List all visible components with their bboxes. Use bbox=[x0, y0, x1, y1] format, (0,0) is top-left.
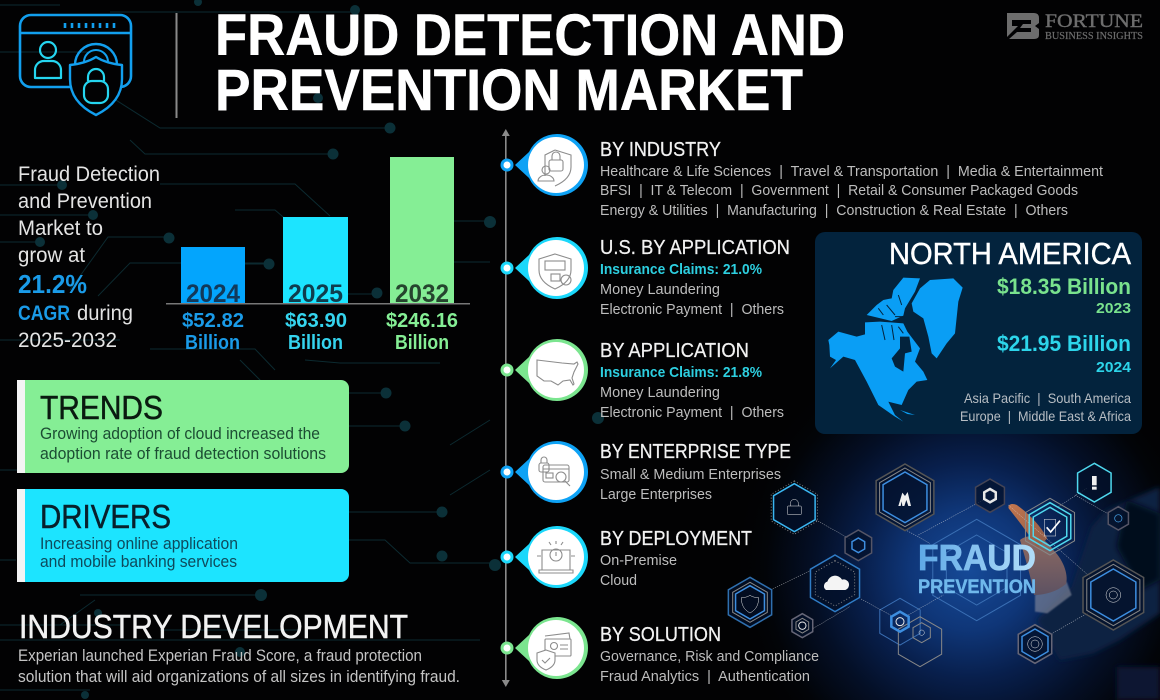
logo: Fortune Business Insights: BUSINESS INSIGHTS bbox=[1045, 31, 1143, 42]
icon: U.S. map outline bbox=[537, 360, 578, 385]
bar chart: market size bbox=[166, 157, 470, 354]
text: market growth statement: 2025-2032 bbox=[18, 329, 117, 352]
panel: North America bbox=[815, 232, 1142, 434]
panel: North America: Asia Pacific | South America bbox=[964, 390, 1131, 406]
divider bbox=[176, 13, 178, 118]
text: U.S. by application: U.S. BY APPLICATION bbox=[600, 237, 790, 259]
text: by deployment: BY DEPLOYMENT bbox=[600, 528, 752, 550]
text: by application: Money Laundering bbox=[600, 384, 720, 401]
text: market growth statement: during bbox=[77, 302, 133, 325]
text: market growth statement: Market to bbox=[18, 217, 103, 240]
hand and suit bbox=[1008, 487, 1160, 700]
icon: identity card with security shield bbox=[20, 15, 131, 115]
photo: fraud prevention hexagon network bbox=[720, 330, 1160, 700]
node: by industry bbox=[500, 134, 588, 196]
panel: North America: $18.35 Billion bbox=[997, 274, 1131, 299]
panel: drivers: Increasing online application bbox=[40, 534, 238, 553]
text: market growth statement: 21.2% bbox=[18, 269, 87, 299]
logo: Fortune Business Insights bbox=[1007, 11, 1143, 42]
icon: ID cards and shield bbox=[537, 633, 571, 670]
panel: North America: 2024 bbox=[1096, 359, 1132, 376]
bar 2032: 2032 bbox=[395, 280, 449, 308]
text: market growth statement: CAGR bbox=[18, 302, 70, 325]
panel: drivers bbox=[17, 489, 349, 582]
photo caption: FRAUD: FRAUD bbox=[918, 537, 1036, 578]
panel: industry development bbox=[18, 608, 460, 686]
panel: drivers: and mobile banking services bbox=[40, 552, 237, 571]
panel: industry development: Experian launched Experian Fraud Score, a fraud protection bbox=[18, 647, 422, 665]
text: by enterprise type: Small & Medium Enterprises bbox=[600, 466, 781, 483]
title: PREVENTION MARKET bbox=[215, 58, 803, 123]
text: market growth statement: Fraud Detection bbox=[18, 163, 160, 186]
photo caption: PREVENTION: PREVENTION bbox=[918, 577, 1036, 598]
icon: laptop with alert bbox=[537, 541, 575, 573]
panel: North America: 2023 bbox=[1096, 300, 1131, 317]
text: by enterprise type: Large Enterprises bbox=[600, 486, 712, 503]
text: by industry bbox=[600, 139, 1104, 219]
node: U.S. by application bbox=[500, 237, 588, 299]
title bbox=[215, 3, 845, 123]
text: by application: BY APPLICATION bbox=[600, 340, 749, 362]
text: by enterprise type bbox=[600, 441, 791, 503]
icon: lock shield and user bbox=[538, 150, 571, 186]
text: U.S. by application bbox=[600, 237, 790, 318]
text: by industry: BY INDUSTRY bbox=[600, 139, 721, 161]
title: FRAUD DETECTION AND bbox=[215, 3, 845, 68]
text: U.S. by application: Insurance Claims: 21.0% bbox=[600, 261, 762, 278]
text: by deployment: Cloud bbox=[600, 572, 637, 589]
text: by deployment: On-Premise bbox=[600, 552, 677, 569]
bar 2024: Billion bbox=[185, 332, 240, 354]
node: by enterprise type bbox=[500, 441, 588, 503]
node: by deployment bbox=[500, 526, 588, 588]
logo: Fortune Business Insights: FORTUNE bbox=[1045, 11, 1143, 32]
icon: payment shield bbox=[539, 254, 571, 289]
panel: trends: adoption rate of fraud detection solutions bbox=[40, 444, 326, 463]
bar 2025: $63.90 bbox=[285, 310, 347, 332]
bar 2024 bbox=[181, 247, 245, 354]
bar 2032: Billion bbox=[395, 332, 449, 354]
icon: card with magnifier bbox=[539, 457, 570, 486]
text: by enterprise type: BY ENTERPRISE TYPE bbox=[600, 441, 791, 463]
text: market growth statement: grow at bbox=[18, 244, 85, 267]
text: by solution: Governance, Risk and Compliance bbox=[600, 648, 819, 665]
bar 2024: 2024 bbox=[186, 280, 240, 308]
text: market growth statement: and Prevention bbox=[18, 190, 152, 213]
panel: trends bbox=[17, 380, 349, 473]
bar 2032 bbox=[386, 157, 458, 354]
text: U.S. by application: Money Laundering bbox=[600, 281, 720, 298]
text: by application: Electronic Payment | Others bbox=[600, 404, 784, 421]
node: by application bbox=[500, 339, 588, 401]
node: by solution bbox=[500, 617, 588, 679]
text: market growth statement bbox=[18, 163, 160, 352]
panel: trends: TRENDS bbox=[40, 389, 163, 426]
small white glyphs bbox=[741, 489, 1122, 651]
text: by application: Insurance Claims: 21.8% bbox=[600, 364, 762, 381]
text: by industry: BFSI | IT & Telecom | Government | Retail & Consumer Packaged Goods bbox=[600, 182, 1078, 199]
timeline axis with arrows bbox=[502, 129, 510, 687]
panel: industry development: INDUSTRY DEVELOPMENT bbox=[19, 608, 408, 645]
text: by deployment bbox=[600, 528, 752, 589]
text: by industry: Healthcare & Life Sciences | Travel & Transportation | Media & Entertainment bbox=[600, 163, 1104, 180]
text: by solution: Fraud Analytics | Authentication bbox=[600, 668, 810, 685]
text: U.S. by application: Electronic Payment | Others bbox=[600, 301, 784, 318]
panel: North America: Europe | Middle East & Africa bbox=[960, 408, 1131, 424]
bar 2025: Billion bbox=[288, 332, 343, 354]
bar 2025: 2025 bbox=[288, 280, 343, 308]
bar 2024: $52.82 bbox=[182, 310, 244, 332]
text: by application bbox=[600, 340, 784, 421]
panel: North America: $21.95 Billion bbox=[997, 331, 1131, 356]
bar 2032: $246.16 bbox=[386, 310, 458, 332]
panel: North America: NORTH AMERICA bbox=[889, 236, 1131, 271]
text: by industry: Energy & Utilities | Manufacturing | Construction & Real Estate | Others bbox=[600, 202, 1068, 219]
panel: industry development: solution that will aid organizations of all sizes in identifying fraud. bbox=[18, 668, 460, 686]
panel: drivers: DRIVERS bbox=[40, 498, 171, 535]
text: by solution bbox=[600, 624, 819, 685]
map: North America bbox=[828, 278, 963, 422]
text: by solution: BY SOLUTION bbox=[600, 624, 721, 646]
panel: trends: Growing adoption of cloud increased the bbox=[40, 424, 320, 443]
bar 2025 bbox=[283, 217, 348, 354]
